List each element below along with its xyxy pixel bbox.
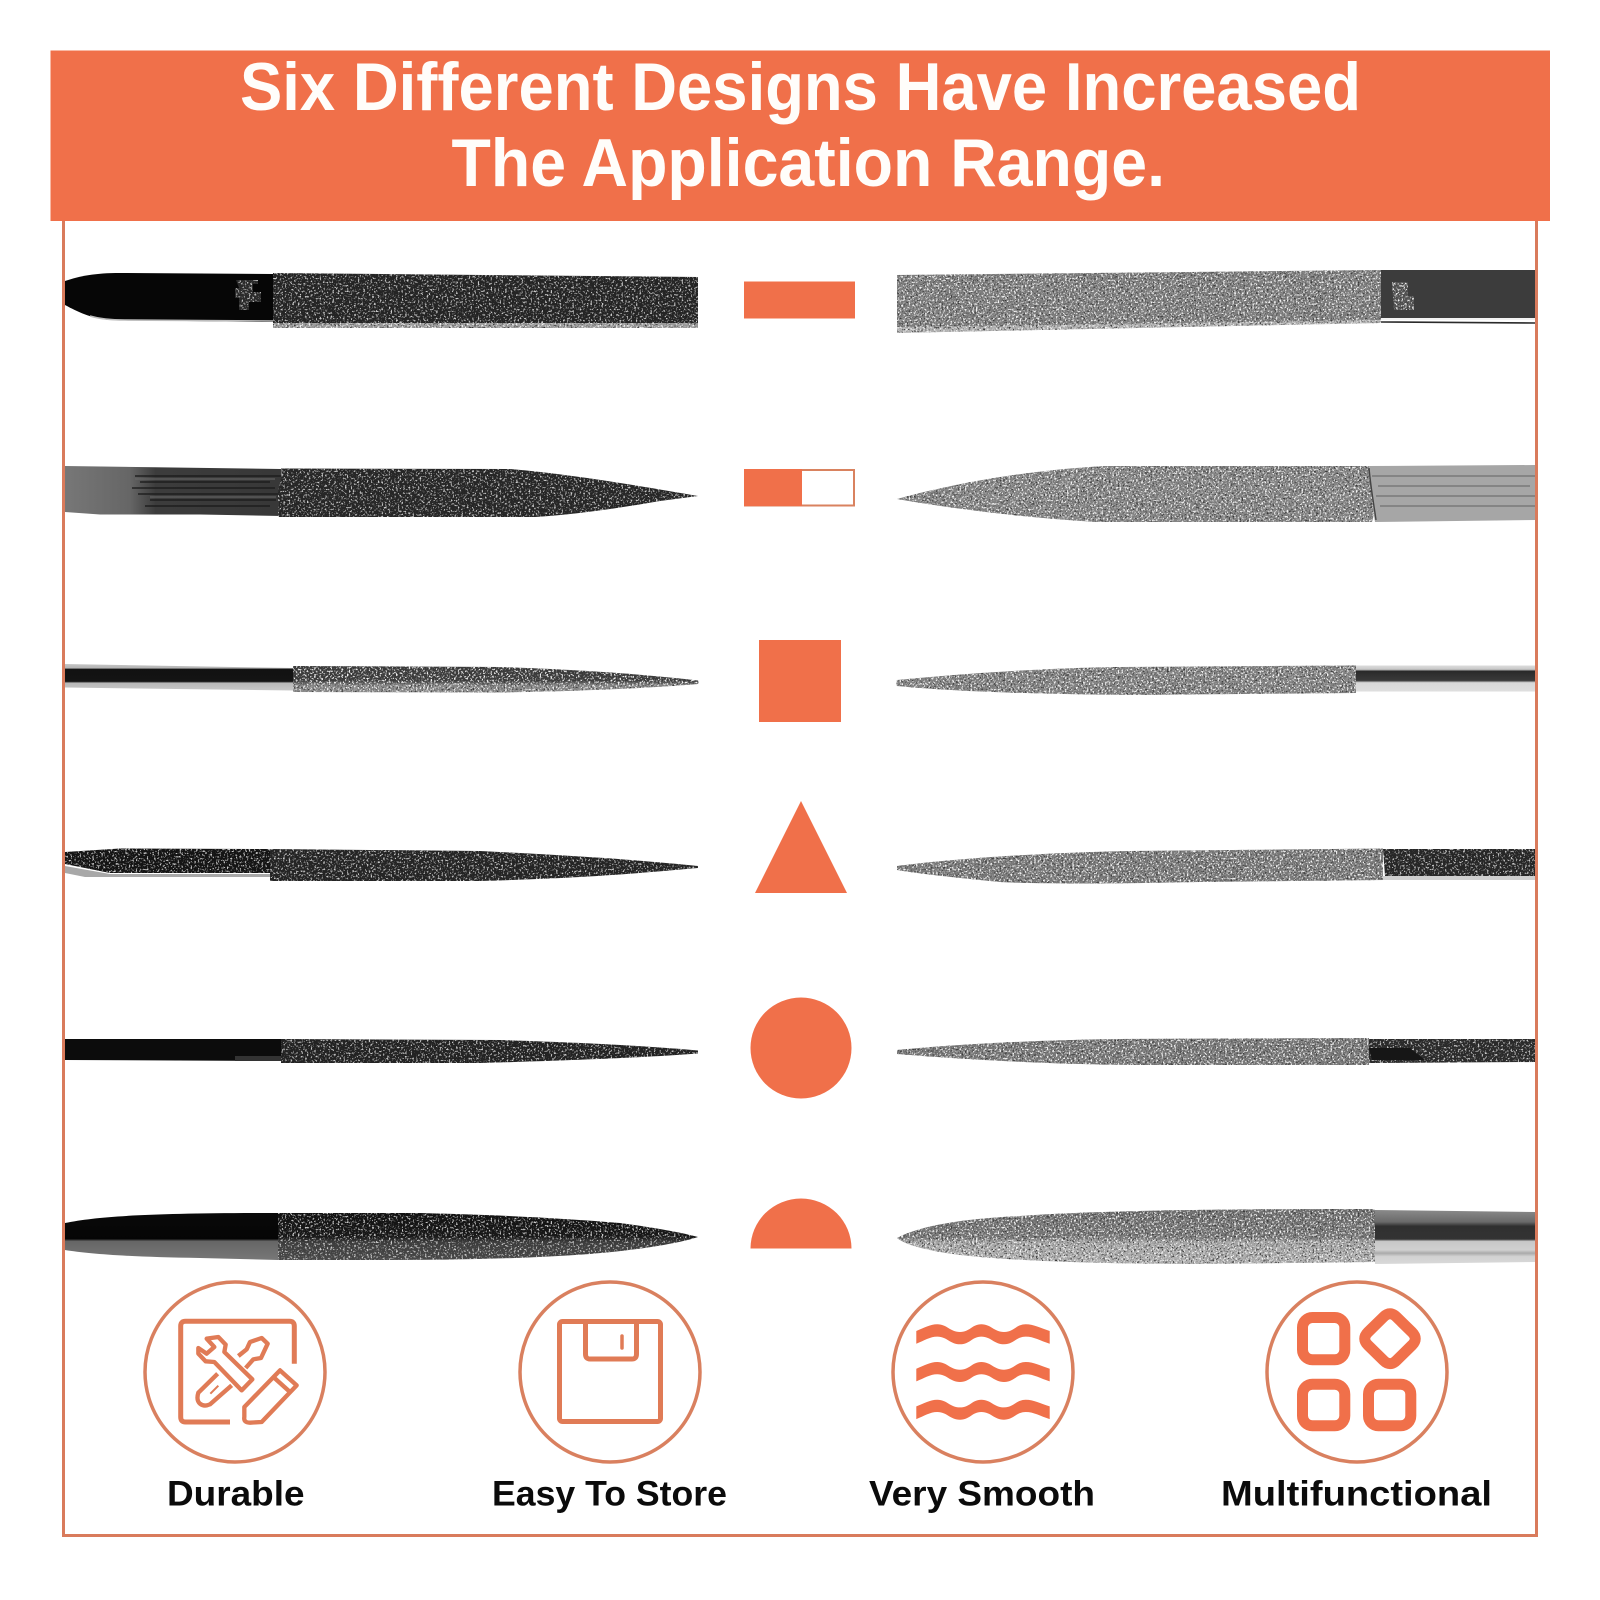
title banner bbox=[50, 49, 1550, 221]
outer frame bbox=[64, 200, 1536, 1536]
file row 5 left: round bbox=[65, 1039, 698, 1063]
label: durable: Durable bbox=[167, 1474, 304, 1514]
file row 6 left: half round bbox=[65, 1213, 698, 1260]
file row 4 right: triangular bbox=[897, 848, 1535, 884]
label: very smooth: Very Smooth bbox=[869, 1474, 1095, 1514]
shape: circle bbox=[750, 998, 852, 1098]
file row 3 right: square bbox=[896, 666, 1535, 695]
title: Six Different Designs Have Increased bbox=[240, 49, 1361, 125]
shape: flat rectangle bbox=[744, 282, 855, 318]
icon: very smooth bbox=[893, 1282, 1073, 1462]
icon: easy to store bbox=[520, 1282, 700, 1462]
file row 6 right: half round bbox=[897, 1209, 1535, 1264]
shape: triangle bbox=[755, 801, 847, 893]
file row 2 right: half round flat bbox=[897, 465, 1535, 522]
icon: durable bbox=[145, 1282, 325, 1462]
title: The Application Range. bbox=[452, 125, 1165, 201]
file row 1 left: flat bbox=[65, 273, 698, 328]
icon: multifunctional bbox=[1267, 1282, 1447, 1462]
file row 5 right: round bbox=[897, 1038, 1535, 1065]
file row 4 left: triangular bbox=[65, 848, 698, 881]
file row 2 left: half round flat bbox=[65, 466, 698, 517]
file row 1 right: flat bbox=[897, 270, 1535, 333]
shape: square bbox=[759, 640, 841, 722]
shape: half circle bbox=[750, 1199, 852, 1248]
shape: half-filled rectangle bbox=[744, 469, 854, 506]
title bbox=[240, 49, 1361, 201]
file row 3 left: square bbox=[65, 664, 698, 692]
label: multifunctional: Multifunctional bbox=[1221, 1474, 1492, 1514]
label: easy to store: Easy To Store bbox=[492, 1474, 727, 1514]
